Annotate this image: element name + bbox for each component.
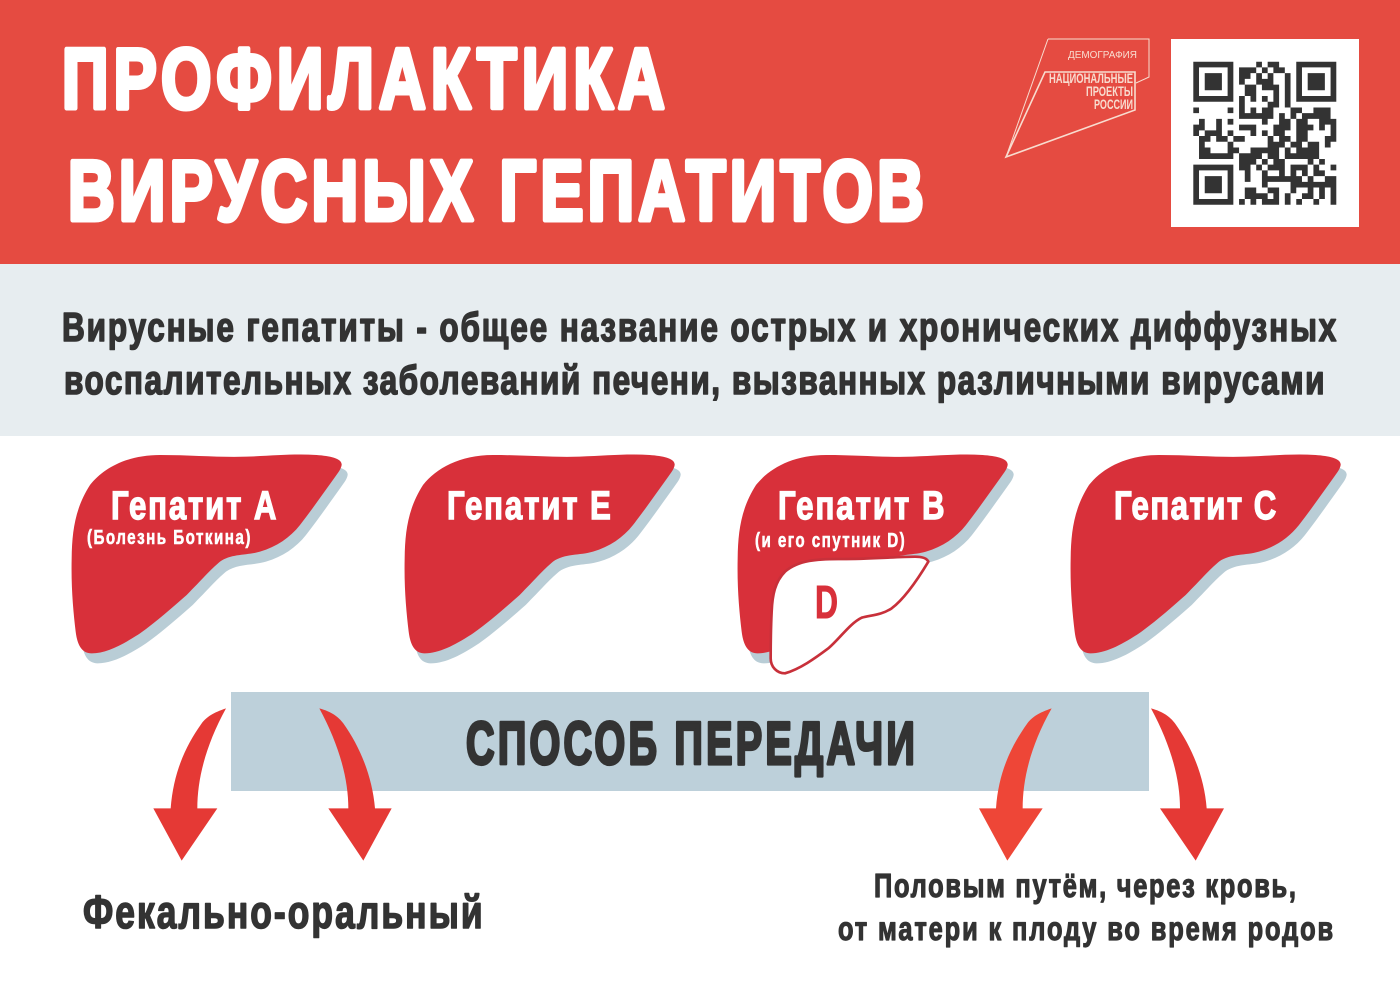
banner heading: СПОСОБ ПЕРЕДАЧИ [466,710,915,777]
definition text: Вирусные гепатиты - общее название острых и хронических диффузных [62,304,1337,350]
arrow: left outer [153,708,226,861]
text: sexual, blood, perinatal route: от матери к плоду во время родов [838,911,1333,948]
sublabel: Botkin disease: (Болезнь Боткина) [87,526,250,549]
sublabel: and its companion D: (и его спутник D) [755,529,905,552]
title: ПРОФИЛАКТИКА [62,31,665,126]
definition band [0,264,1400,436]
logo: national projects [1006,39,1149,157]
label: hepatitis C: Гепатит С [1114,483,1276,528]
logo: national projects: РОССИИ [1094,96,1133,112]
logo: national projects: ДЕМОГРАФИЯ [1068,49,1137,61]
label: hepatitis B: Гепатит В [778,483,945,528]
arrow: right inner [979,708,1052,861]
text: sexual, blood, perinatal route [838,868,1333,948]
definition text [62,304,1337,403]
arrow: right outer [1151,708,1224,861]
liver: hepatitis B with D [738,455,1014,673]
transmission banner [231,692,1149,791]
title [62,31,924,238]
label: hepatitis E: Гепатит Е [447,483,611,528]
definition text: воспалительных заболеваний печени, вызванных различными вирусами [64,357,1324,403]
arrow: left inner [319,708,392,861]
header panel [0,0,1400,264]
title: ВИРУСНЫХ ГЕПАТИТОВ [68,143,924,238]
label: D: D [815,576,838,628]
liver: hepatitis D [771,557,928,673]
label: hepatitis A: Гепатит А [111,483,276,528]
logo: national projects: НАЦИОНАЛЬНЫЕ [1049,70,1133,86]
liver: hepatitis A [72,455,348,663]
liver: hepatitis E [405,455,681,663]
logo: national projects: ПРОЕКТЫ [1086,83,1133,99]
QR code [1171,39,1359,227]
liver: hepatitis C [1071,455,1347,663]
text: sexual, blood, perinatal route: Половым путём, через кровь, [874,868,1296,905]
text: fecal-oral route: Фекально-оральный [83,887,483,938]
